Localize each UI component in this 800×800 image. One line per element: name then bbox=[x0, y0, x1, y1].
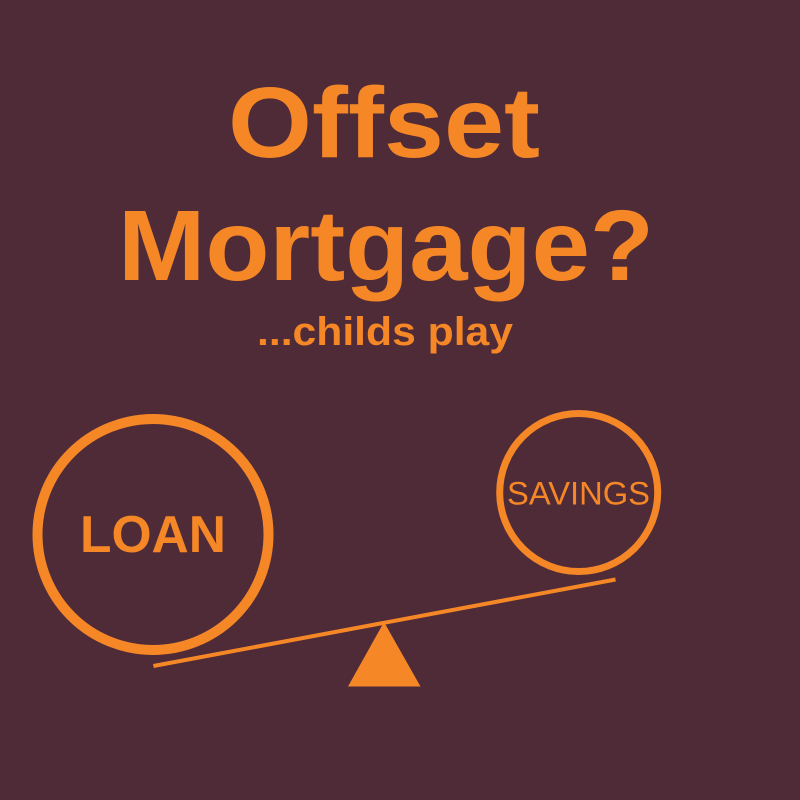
balance beam bbox=[153, 580, 616, 666]
title bbox=[118, 67, 654, 302]
title: Mortgage? bbox=[118, 190, 654, 302]
savings circle: SAVINGS bbox=[507, 476, 650, 512]
savings circle bbox=[500, 414, 658, 572]
loan circle bbox=[38, 419, 268, 650]
seesaw illustration bbox=[38, 414, 658, 686]
fulcrum triangle bbox=[348, 622, 420, 686]
title: Offset bbox=[228, 67, 540, 179]
subtitle: ...childs play bbox=[257, 310, 514, 354]
loan circle: LOAN bbox=[80, 506, 226, 564]
